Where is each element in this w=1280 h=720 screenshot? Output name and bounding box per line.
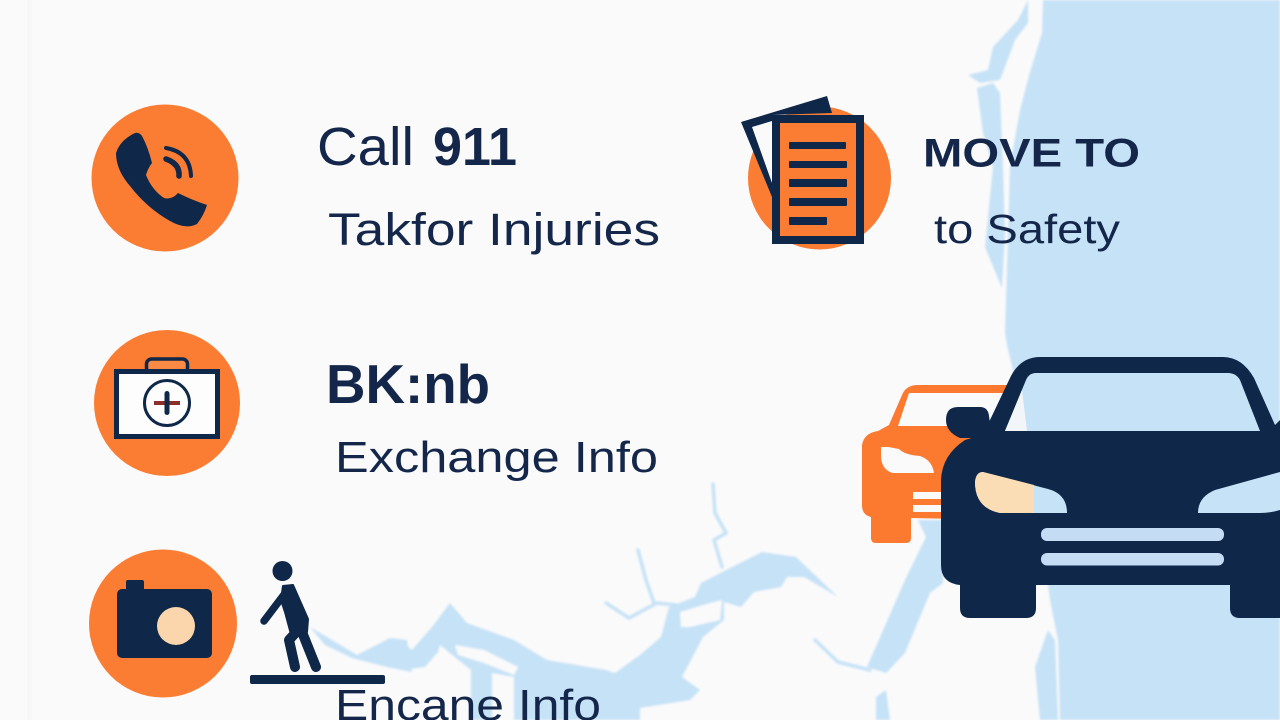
map: coastline and water background (310, 0, 1280, 720)
icon: kit case (116, 372, 218, 436)
lower right sliver (1035, 630, 1058, 720)
icon: front sheet (776, 119, 860, 240)
icon: camera lens (157, 607, 195, 645)
heading: Call 911 (317, 117, 517, 177)
icon: text lines (789, 142, 847, 225)
headlight (881, 447, 934, 473)
windshield (898, 393, 1010, 426)
step: documents icon (741, 96, 891, 250)
step: call 911 icon (92, 104, 238, 252)
left headlight (975, 472, 1067, 513)
heading: Call 911: Call (317, 117, 414, 177)
upper inlet (968, 0, 1028, 83)
grille (913, 492, 947, 512)
sea on the right (1005, 0, 1280, 720)
upper channel (977, 83, 1005, 288)
white island in river (680, 600, 722, 627)
central river channel (540, 552, 838, 720)
text: Exchange Info: Exchange Info (335, 433, 658, 482)
heading: BK:nb: BK:nb (326, 353, 490, 415)
thin branches (606, 484, 870, 670)
right headlight (1198, 472, 1280, 513)
icon: phone signal waves (166, 148, 191, 176)
windshield (1005, 373, 1260, 431)
mirror (946, 407, 992, 438)
white island in lake (455, 645, 518, 675)
illustration: orange car behind (862, 385, 1010, 543)
step: first aid icon (94, 330, 240, 476)
heading: Call 911: 911 (433, 117, 517, 177)
heading: MOVE TO: MOVE TO (923, 132, 1140, 176)
grille bars (1041, 528, 1224, 566)
icon: back sheet (741, 96, 832, 197)
step: camera icon (89, 550, 237, 698)
streak behind figure (310, 627, 412, 672)
text: to Safety: to Safety (934, 206, 1121, 252)
illustration: navy car in front (941, 357, 1280, 618)
icon: walking person on platform (250, 561, 385, 684)
text: Takfor Injuries: Takfor Injuries (328, 204, 660, 255)
icon: camera body (117, 580, 212, 658)
icon: kit handle (146, 359, 188, 373)
lower lake (400, 603, 640, 720)
icon: phone handset (116, 133, 207, 226)
icon: medical cross (144, 380, 190, 426)
right river channel (867, 520, 943, 673)
